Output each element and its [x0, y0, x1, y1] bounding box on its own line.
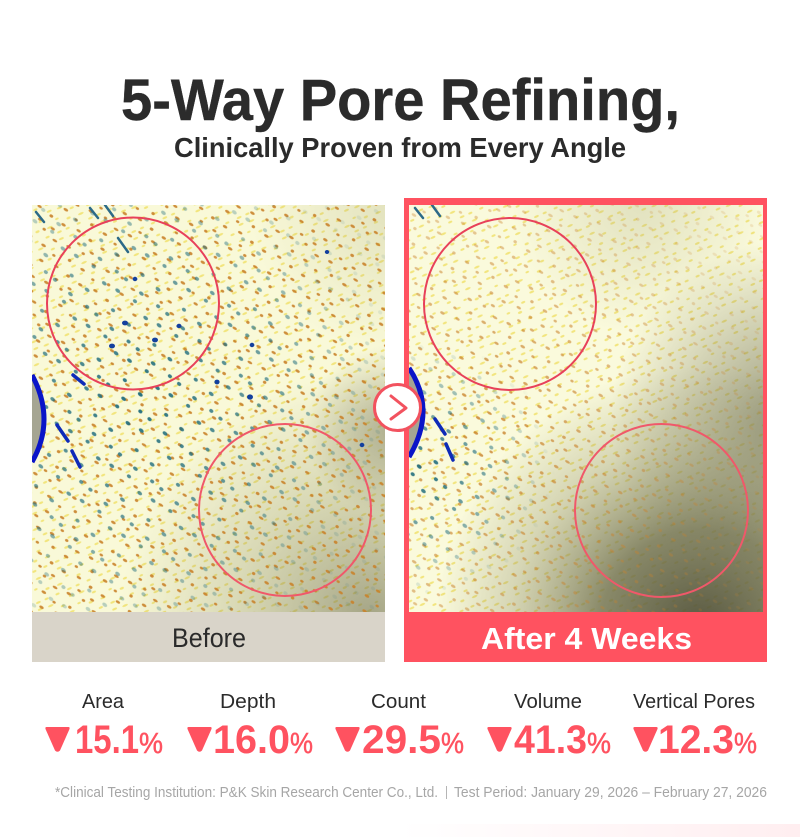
skin analysis photo: after	[409, 205, 763, 612]
circle: before upper area	[47, 218, 219, 390]
stat: volume: %	[587, 728, 611, 760]
stat: vertical pores	[633, 690, 757, 762]
stat: vertical pores: %	[734, 728, 757, 760]
footnote: *Clinical Testing Institution: P&K Skin Research Center Co., Ltd.	[55, 784, 438, 801]
panel: before	[32, 205, 385, 662]
stat: volume: Volume	[514, 690, 582, 713]
stat: volume	[487, 690, 611, 762]
stat: depth: %	[290, 728, 313, 760]
caption: before	[32, 612, 385, 662]
stat: volume: 41.3	[514, 718, 587, 762]
stat: depth	[187, 690, 313, 762]
stat: area: %	[139, 728, 163, 760]
stat: count: %	[441, 728, 464, 760]
icon: arrow button	[374, 384, 420, 430]
footnote	[55, 784, 767, 801]
subtitle: Clinically Proven from Every Angle	[174, 132, 626, 163]
decorative pink strip	[400, 824, 800, 837]
stat: count: 29.5	[362, 718, 441, 762]
caption: after 4 weeks: After 4 Weeks	[481, 621, 692, 656]
stat: count: Count	[371, 690, 426, 713]
stat: vertical pores: 12.3	[658, 718, 734, 762]
stat: depth: 16.0	[213, 718, 290, 762]
highlight frame	[404, 198, 767, 662]
panel: after 4 weeks	[404, 198, 767, 662]
footnote: Test Period: January 29, 2026 – February 27, 2026	[454, 784, 767, 801]
stat: area	[45, 690, 163, 762]
circle: before lower area	[199, 424, 371, 596]
stat: depth: Depth	[220, 690, 276, 713]
skin analysis photo: before	[32, 205, 385, 612]
caption: before: Before	[172, 623, 246, 653]
stat: vertical pores: Vertical Pores	[633, 690, 755, 713]
stat: area: 15.1	[75, 718, 139, 762]
circle: after lower area	[575, 424, 748, 597]
stat: area: Area	[82, 690, 125, 713]
stat: count	[335, 690, 464, 762]
title: 5-Way Pore Refining,	[121, 68, 680, 133]
circle: after upper area	[424, 218, 596, 390]
